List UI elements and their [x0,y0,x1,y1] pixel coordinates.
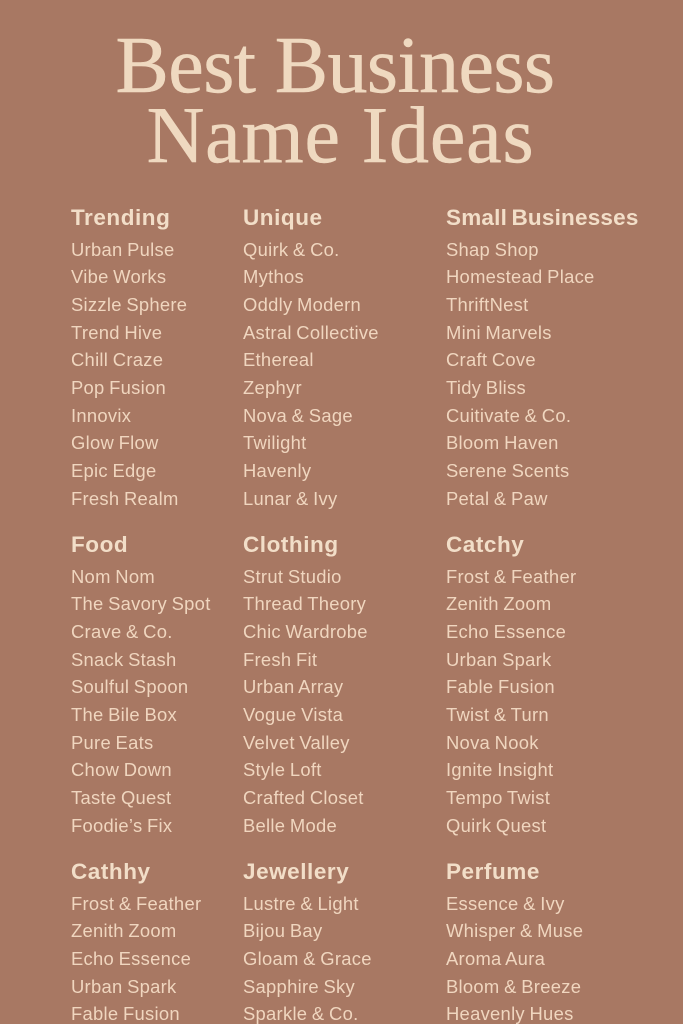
panel: Perfume: Aroma Aura [446,948,545,969]
panel: Catchy: Ignite Insight [446,759,553,780]
panel: Small Businesses: Craft Cove [446,349,536,370]
panel: Jewellery: Sparkle & Co. [243,1003,358,1024]
panel: Small Businesses: Tidy Bliss [446,377,526,398]
panel: Small Businesses [446,205,639,508]
panel: Catchy: Zenith Zoom [446,593,552,614]
panel: Small Businesses: Serene Scents [446,460,569,481]
panel: Cathhy: Frost & Feather [71,893,201,914]
panel: Unique: Unique [243,205,323,230]
panel: Perfume: Heavenly Hues [446,1003,574,1024]
panel: Jewellery: Lustre & Light [243,893,359,914]
panel: Clothing: Clothing [243,532,339,557]
panel: Trending: Glow Flow [71,432,159,453]
panel: Catchy: Urban Spark [446,649,552,670]
panel: Small Businesses: Homestead Place [446,266,595,287]
panel: Catchy [446,532,576,836]
panel: Food: Snack Stash [71,649,177,670]
panel: Trending: Chill Craze [71,349,163,370]
panel: Unique: Lunar & Ivy [243,488,338,508]
panel: Unique: Ethereal [243,349,314,370]
panel: Trending: Fresh Realm [71,488,179,508]
panel: Trending: Vibe Works [71,266,166,287]
panel: Catchy: Echo Essence [446,621,566,642]
panel: Small Businesses: Shap Shop [446,239,539,260]
panel: Food: Taste Quest [71,787,171,808]
panel: Small Businesses: Petal & Paw [446,488,548,508]
panel: Trending: Urban Pulse [71,239,174,260]
panel: Catchy: Tempo Twist [446,787,550,808]
panel: Food: Chow Down [71,759,172,780]
panel: Cathhy: Cathhy [71,859,151,884]
panel: Catchy: Fable Fusion [446,676,555,697]
panel: Food [71,532,211,836]
panel: Jewellery: Jewellery [243,859,349,884]
panel: Perfume: Perfume [446,859,540,884]
panel: Clothing: Crafted Closet [243,787,364,808]
panel: Food: Pure Eats [71,732,153,753]
panel: Small Businesses: Mini Marvels [446,322,552,343]
panel: Jewellery [243,859,372,1024]
panel: Clothing: Style Loft [243,759,322,780]
panel: Small Businesses: Small Businesses [446,205,639,230]
title: Name Ideas [147,92,534,180]
panel: Unique: Twilight [243,432,307,453]
panel: Food: Soulful Spoon [71,676,188,697]
panel: Food: Foodie’s Fix [71,814,172,836]
panel: Food: Crave & Co. [71,621,173,642]
panel: Clothing: Chic Wardrobe [243,621,368,642]
panel: Clothing: Strut Studio [243,566,342,587]
panel: Trending: Trending [71,205,170,230]
panel: Catchy: Quirk Quest [446,814,546,836]
panel: Small Businesses: Bloom Haven [446,432,559,453]
panel: Catchy: Frost & Feather [446,566,576,587]
panel: Jewellery: Gloam & Grace [243,948,372,969]
panel: Cathhy: Fable Fusion [71,1003,180,1024]
panel: Cathhy: Echo Essence [71,948,191,969]
panel: Catchy: Nova Nook [446,732,539,753]
panel: Unique: Oddly Modern [243,294,361,315]
panel: Clothing: Fresh Fit [243,649,317,670]
panel: Clothing: Belle Mode [243,814,337,836]
panel: Cathhy: Zenith Zoom [71,920,177,941]
panel: Food: The Bile Box [71,704,177,725]
panel: Catchy: Twist & Turn [446,704,549,725]
panel: Catchy: Catchy [446,532,524,557]
panel: Trending: Pop Fusion [71,377,166,398]
panel: Unique: Havenly [243,460,311,481]
panel: Perfume: Whisper & Muse [446,920,583,941]
panel: Unique: Astral Collective [243,322,379,343]
panel: Unique: Nova & Sage [243,405,353,426]
panel: Unique: Zephyr [243,377,302,398]
panel: Food: Food [71,532,128,557]
panel: Perfume [446,859,583,1024]
panel: Small Businesses: ThriftNest [446,294,529,315]
panel: Perfume: Bloom & Breeze [446,976,581,997]
panel: Unique [243,205,379,509]
panel: Unique: Mythos [243,266,304,287]
panel: Small Businesses: Cuitivate & Co. [446,405,571,426]
panel: Jewellery: Sapphire Sky [243,976,355,997]
panel: Trending [71,205,187,508]
panel: Jewellery: Bijou Bay [243,920,322,941]
panel: Cathhy: Urban Spark [71,976,177,997]
title: Best Business [116,22,554,110]
panel: Clothing [243,532,368,836]
panel: Food: Nom Nom [71,566,155,587]
panel: Trending: Trend Hive [71,322,162,343]
title [116,22,554,180]
panel: Clothing: Thread Theory [243,593,366,614]
panel: Food: The Savory Spot [71,593,211,614]
panel: Clothing: Vogue Vista [243,704,343,725]
panel: Trending: Innovix [71,405,131,426]
panel: Trending: Sizzle Sphere [71,294,187,315]
panel: Trending: Epic Edge [71,460,157,481]
panel: Clothing: Velvet Valley [243,732,350,753]
panel: Clothing: Urban Array [243,676,343,697]
panel: Unique: Quirk & Co. [243,239,340,260]
panel: Perfume: Essence & Ivy [446,893,565,914]
panel: Cathhy [71,859,201,1024]
